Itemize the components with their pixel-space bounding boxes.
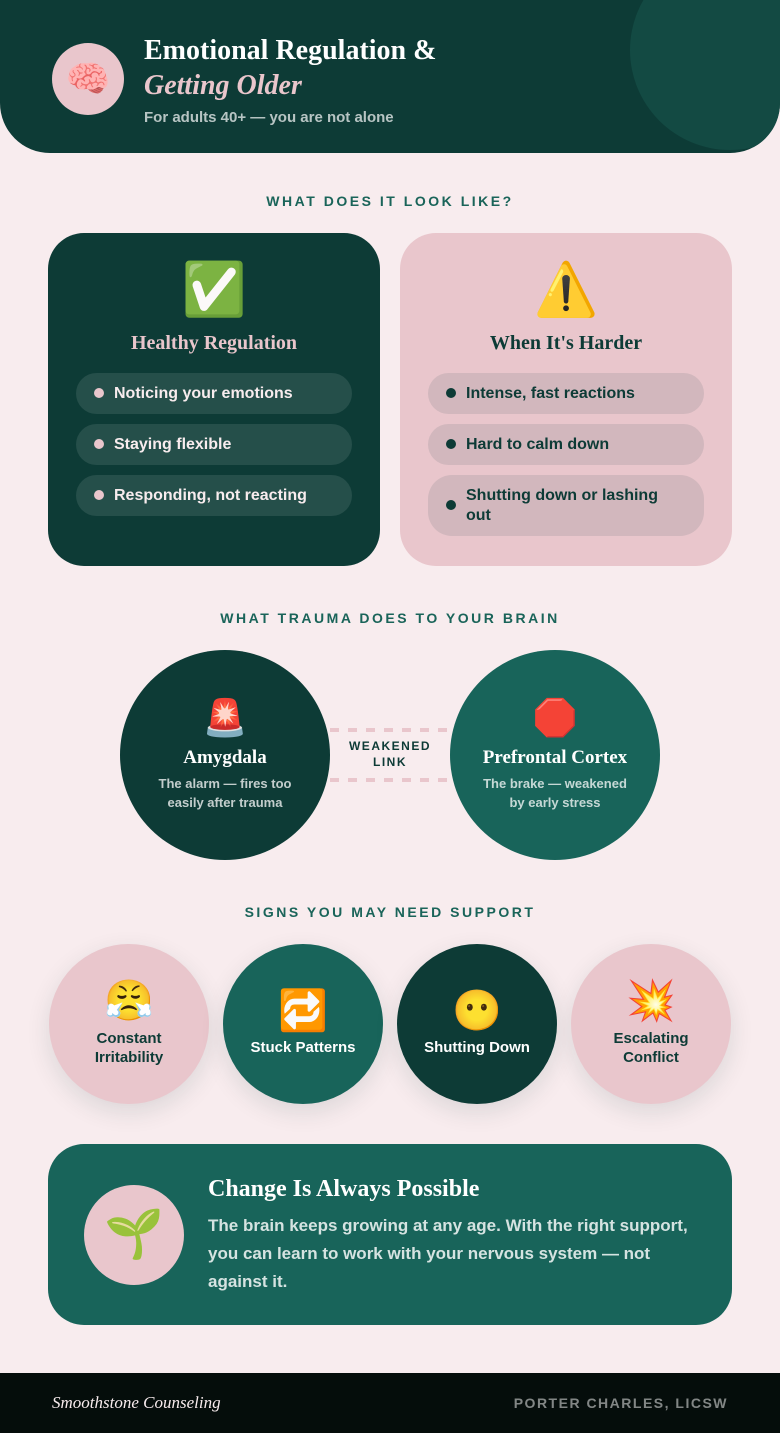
panel: healthy regulation bbox=[48, 233, 380, 566]
callout heading: Change Is Always Possible bbox=[208, 1176, 479, 1202]
item: flexible bbox=[76, 424, 352, 465]
amygdala description bbox=[158, 776, 291, 810]
circle: prefrontal cortex bbox=[450, 650, 660, 860]
prefrontal description: The brake — weakened bbox=[483, 776, 627, 791]
title: Getting Older bbox=[144, 70, 302, 101]
item: flexible: Staying flexible bbox=[114, 436, 231, 453]
sign: escalating conflict bbox=[571, 944, 731, 1104]
item: intense bbox=[428, 373, 704, 414]
title bbox=[144, 35, 436, 101]
icon: no-mouth face: 😶 bbox=[452, 989, 502, 1033]
prefrontal description: by early stress bbox=[509, 795, 601, 810]
panel: change is possible bbox=[48, 1144, 732, 1325]
label: Shutting Down bbox=[424, 1039, 530, 1056]
icon: repeat: 🔁 bbox=[278, 989, 328, 1033]
item: noticing: Noticing your emotions bbox=[114, 385, 293, 402]
icon: siren: 🚨 bbox=[203, 697, 247, 738]
dashed line top bbox=[330, 728, 447, 732]
sign: stuck patterns bbox=[223, 944, 383, 1104]
label: Conflict bbox=[623, 1049, 679, 1066]
heading: what does it look like: WHAT DOES IT LOOK LIKE? bbox=[266, 193, 514, 209]
brand: Smoothstone Counseling bbox=[52, 1393, 221, 1412]
link label bbox=[349, 739, 431, 769]
connector: weakened link bbox=[330, 728, 447, 782]
subtitle: For adults 40+ — you are not alone bbox=[144, 108, 394, 126]
link label: WEAKENED bbox=[349, 739, 431, 753]
sign: irritability bbox=[49, 944, 209, 1104]
clinician name: PORTER CHARLES, LICSW bbox=[514, 1395, 728, 1411]
amygdala description: The alarm — fires too bbox=[159, 776, 291, 791]
heading: what trauma does: WHAT TRAUMA DOES TO YOUR BRAIN bbox=[220, 610, 560, 626]
heading: healthy regulation: Healthy Regulation bbox=[131, 332, 297, 354]
label bbox=[95, 1030, 164, 1066]
label: Constant bbox=[96, 1030, 162, 1047]
icon: brain bbox=[52, 43, 124, 115]
footer bbox=[0, 1373, 780, 1433]
item: responding bbox=[76, 475, 352, 516]
item: calm down bbox=[428, 424, 704, 465]
icon: check mark: ✅ bbox=[182, 261, 246, 319]
header banner bbox=[0, 0, 780, 153]
item: calm down: Hard to calm down bbox=[466, 436, 609, 453]
heading: when it's harder: When It's Harder bbox=[490, 332, 642, 354]
icon: warning: ⚠️ bbox=[534, 261, 598, 319]
amygdala name: Amygdala bbox=[183, 747, 267, 768]
callout text: The brain keeps growing at any age. With the right support, you can learn to work with your nervous system — not against it. bbox=[208, 1216, 688, 1291]
icon: collision: 💥 bbox=[626, 979, 676, 1023]
decorative circle bbox=[630, 0, 780, 150]
item: shutting down bbox=[428, 475, 704, 536]
sign: shutting down bbox=[397, 944, 557, 1104]
label bbox=[613, 1030, 689, 1066]
title: Emotional Regulation & bbox=[144, 35, 436, 66]
item: shutting down: Shutting down or lashing out bbox=[466, 487, 658, 524]
label: Stuck Patterns bbox=[250, 1039, 356, 1056]
panel: when it's harder bbox=[400, 233, 732, 566]
heading: signs: SIGNS YOU MAY NEED SUPPORT bbox=[245, 904, 535, 920]
icon: seedling bbox=[84, 1185, 184, 1285]
icon: brain: 🧠 bbox=[66, 58, 110, 99]
link label: LINK bbox=[373, 755, 407, 769]
prefrontal description bbox=[483, 776, 627, 810]
dashed line bottom bbox=[330, 778, 447, 782]
item: intense: Intense, fast reactions bbox=[466, 385, 635, 402]
item: responding: Responding, not reacting bbox=[114, 487, 307, 504]
circle: amygdala bbox=[120, 650, 330, 860]
label: Irritability bbox=[95, 1049, 163, 1066]
label: Escalating bbox=[613, 1030, 689, 1047]
amygdala description: easily after trauma bbox=[168, 795, 282, 810]
item: noticing bbox=[76, 373, 352, 414]
prefrontal name: Prefrontal Cortex bbox=[483, 747, 627, 768]
icon: stop sign: 🛑 bbox=[533, 697, 577, 738]
icon: seedling: 🌱 bbox=[104, 1208, 164, 1261]
icon: huffing face: 😤 bbox=[104, 979, 154, 1023]
